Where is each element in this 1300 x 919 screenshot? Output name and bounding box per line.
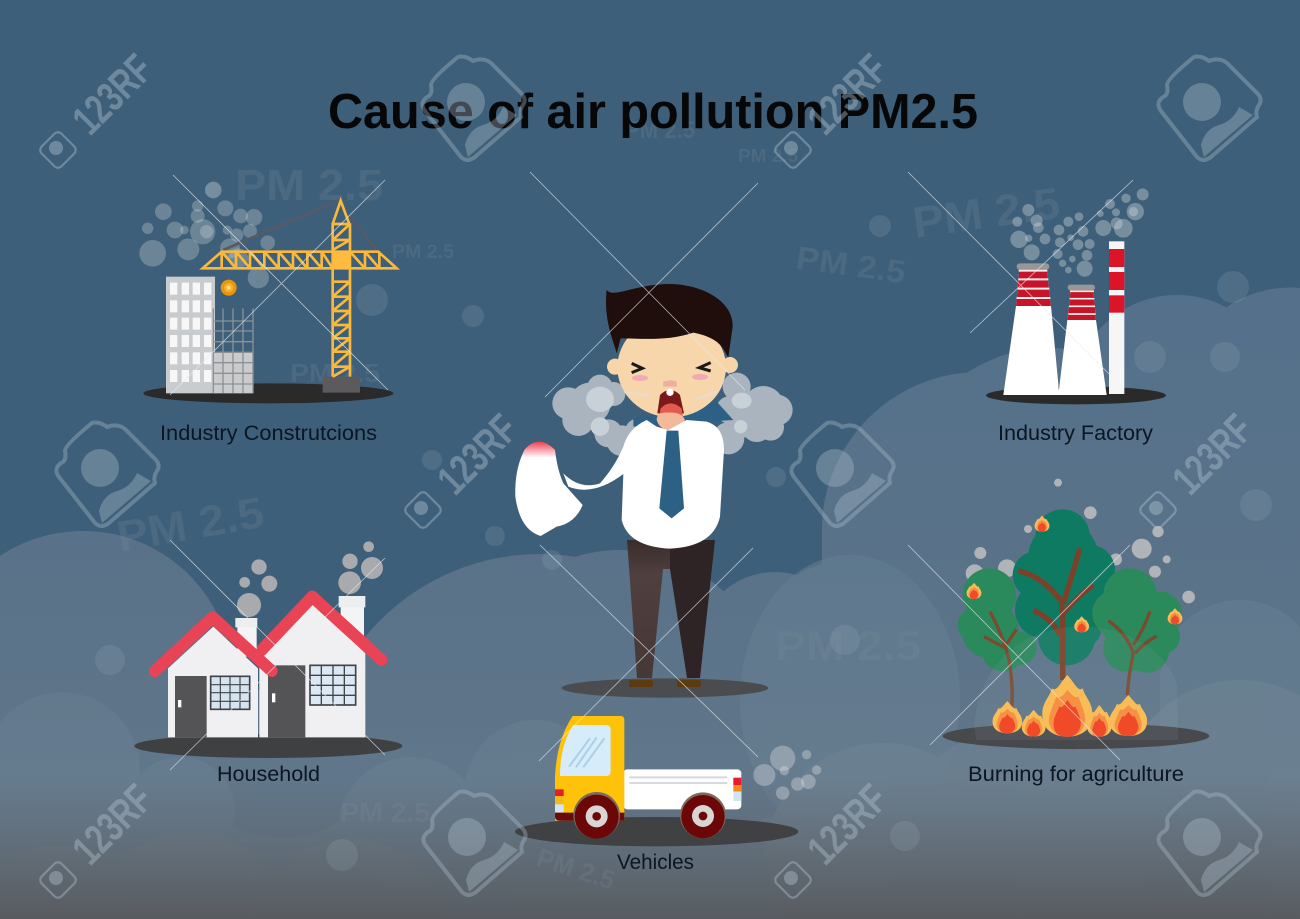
collar <box>633 402 733 427</box>
cab <box>555 716 624 821</box>
shadow <box>986 386 1166 404</box>
left tree <box>958 568 1037 707</box>
chimney <box>1109 241 1124 394</box>
faint PM 2.5 texts: PM 2.5 <box>738 146 798 166</box>
shirt <box>563 420 724 549</box>
faint floating particles <box>95 182 1272 871</box>
wheels <box>573 792 726 839</box>
shadow <box>562 678 768 698</box>
cooling tower left <box>1003 263 1059 395</box>
right tree <box>1092 568 1182 695</box>
smoke <box>237 541 383 617</box>
building <box>166 277 253 393</box>
smoke <box>1010 188 1149 277</box>
construction illustration <box>139 182 397 403</box>
trousers <box>627 540 715 687</box>
crane <box>203 200 397 393</box>
label: Burning for agriculture: Burning for agriculture <box>968 763 1184 786</box>
faint PM 2.5 texts: PM 2.5 <box>775 622 921 669</box>
label: Household: Household <box>217 763 320 786</box>
watermark: 123RF marks: 123RF <box>63 45 161 143</box>
shadow <box>943 723 1209 749</box>
faint PM 2.5 texts: PM 2.5 <box>240 738 300 760</box>
faint PM 2.5 texts: PM 2.5 <box>290 358 380 388</box>
faint PM 2.5 texts: PM 2.5 <box>113 488 267 562</box>
faint PM 2.5 texts: PM 2.5 <box>625 117 695 144</box>
exhaust particles <box>753 746 821 800</box>
smoke <box>966 479 1195 603</box>
factory illustration <box>986 188 1166 404</box>
watermark: 123RF marks: 123RF <box>428 405 526 503</box>
smoke clouds <box>552 373 793 456</box>
haze over tree base <box>974 627 1178 740</box>
truck illustration <box>515 716 821 846</box>
handkerchief <box>515 442 583 536</box>
faint PM 2.5 texts: PM 2.5 <box>235 161 383 210</box>
faint PM 2.5 texts: PM 2.5 <box>794 239 908 290</box>
title: Cause of air pollution PM2.5 <box>328 85 978 139</box>
tie <box>659 431 684 518</box>
left house <box>155 617 272 737</box>
watermark: cross lines <box>170 172 1133 770</box>
central man coughing <box>515 284 793 698</box>
smoke particles <box>139 182 275 288</box>
watermark: 123RF marks: 123RF <box>798 45 896 143</box>
truck bed <box>623 769 741 809</box>
faint PM 2.5 texts: PM 2.5 <box>910 179 1063 248</box>
faint PM 2.5 texts: PM 2.5 <box>340 797 430 828</box>
shadow <box>143 383 393 403</box>
label: Vehicles: Vehicles <box>617 851 694 874</box>
watermark: 123RF marks: 123RF <box>798 775 896 873</box>
faint PM 2.5 texts: PM 2.5 <box>533 842 619 895</box>
watermark: 123RF marks: 123RF <box>63 775 161 873</box>
shadow <box>515 817 798 846</box>
watermark: 123RF marks: 123RF <box>1163 405 1261 503</box>
label: Industry Constructions: Industry Construtcions <box>160 422 377 445</box>
right house <box>259 596 382 737</box>
shadow <box>134 734 402 758</box>
faint PM 2.5 texts <box>113 117 1063 895</box>
faint PM 2.5 texts: PM 2.5 <box>392 242 454 263</box>
cooling tower right <box>1058 285 1107 395</box>
ground flames <box>993 675 1147 737</box>
label: Industry Factory: Industry Factory <box>998 422 1153 445</box>
tree flames <box>967 516 1182 632</box>
centre tree <box>1013 509 1115 680</box>
background pollution clouds <box>0 288 1300 919</box>
head <box>606 284 738 430</box>
burning trees illustration <box>943 479 1209 749</box>
household illustration <box>134 541 402 758</box>
